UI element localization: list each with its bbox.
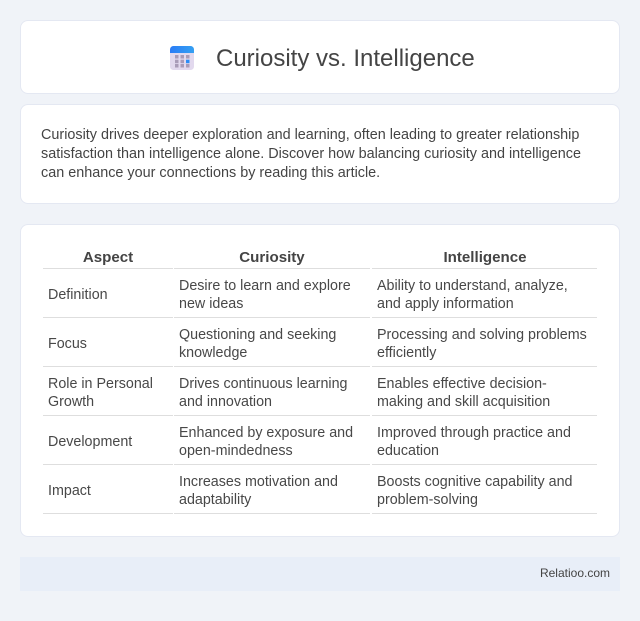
row: impact: adaptability	[179, 492, 251, 508]
icon: calendar	[170, 46, 194, 70]
row: definition	[48, 278, 568, 312]
row: definition: and apply information	[377, 296, 514, 312]
table header: Curiosity	[239, 249, 305, 266]
row: impact: Boosts cognitive capability and	[377, 474, 573, 490]
row: definition: new ideas	[179, 296, 243, 312]
row: role in personal growth: Role in Personal	[48, 376, 153, 392]
table header	[83, 249, 527, 266]
intro paragraph: can enhance your connections by reading this article.	[41, 165, 380, 181]
row: definition: Definition	[48, 287, 108, 303]
panel: comparison table	[20, 224, 620, 537]
row: role in personal growth: Growth	[48, 394, 94, 410]
intro paragraph: Curiosity drives deeper exploration and learning, often leading to greater relationship	[41, 127, 579, 143]
row: development	[48, 425, 571, 459]
row: impact: Impact	[48, 483, 91, 499]
row: role in personal growth	[48, 376, 550, 410]
intro paragraph: satisfaction than intelligence alone. Discover how balancing curiosity and intelligence	[41, 146, 581, 162]
row: role in personal growth: making and skill acquisition	[377, 394, 550, 410]
footer brand text: Relatioo.com	[540, 566, 610, 580]
row: development: Development	[48, 434, 132, 450]
panel: intro text	[20, 104, 620, 204]
row: development: Enhanced by exposure and	[179, 425, 353, 441]
row: focus: knowledge	[179, 345, 247, 361]
row: role in personal growth: Enables effective decision-	[377, 376, 547, 392]
row: focus: efficiently	[377, 345, 436, 361]
panel: title card	[20, 20, 620, 94]
row: focus	[48, 327, 587, 361]
intro paragraph	[41, 127, 581, 181]
row: role in personal growth: Drives continuous learning	[179, 376, 347, 392]
row: role in personal growth: and innovation	[179, 394, 272, 410]
title: Curiosity vs. Intelligence	[216, 45, 475, 72]
table header: Intelligence	[443, 249, 527, 266]
row: definition: Ability to understand, analyze,	[377, 278, 568, 294]
row: impact	[48, 474, 573, 508]
footer bar	[20, 557, 620, 591]
table header: Aspect	[83, 249, 133, 266]
row: development: Improved through practice and	[377, 425, 571, 441]
row: development: education	[377, 443, 439, 459]
row: impact: problem-solving	[377, 492, 478, 508]
row: focus: Focus	[48, 336, 87, 352]
row: impact: Increases motivation and	[179, 474, 338, 490]
row: focus: Processing and solving problems	[377, 327, 587, 343]
row: focus: Questioning and seeking	[179, 327, 336, 343]
row: development: open-mindedness	[179, 443, 293, 459]
row: definition: Desire to learn and explore	[179, 278, 351, 294]
